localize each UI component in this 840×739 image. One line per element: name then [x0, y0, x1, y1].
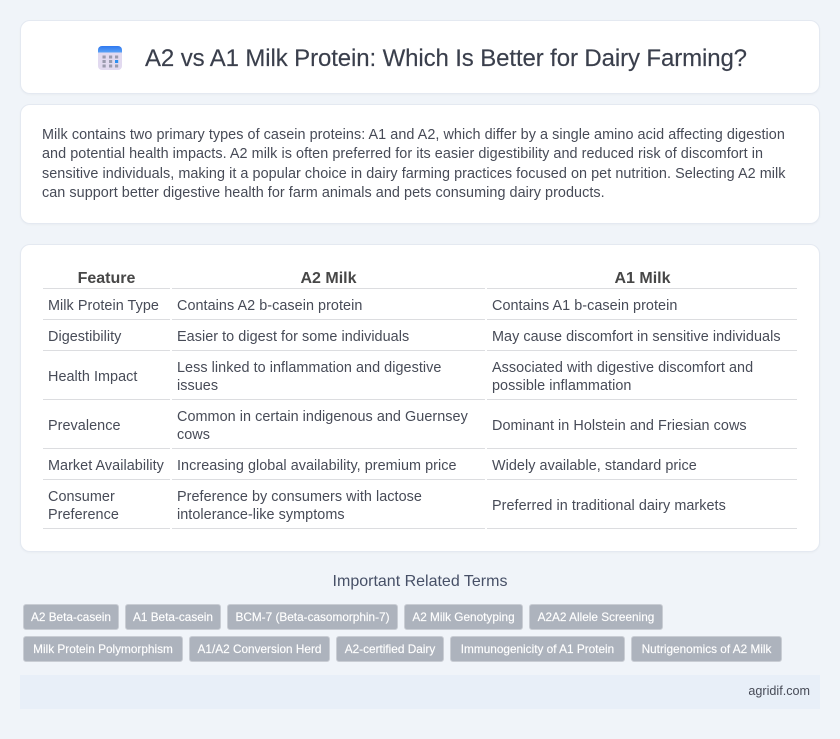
- row: consumer preference: Preferred in traditional dairy markets: [492, 498, 726, 514]
- related terms tags: A2 Milk Genotyping: [412, 610, 515, 624]
- header card: [20, 20, 820, 94]
- row: consumer preference: intolerance-like symptoms: [177, 507, 345, 523]
- related terms tags: A2 Beta-casein: [31, 610, 111, 624]
- row: consumer preference: Consumer: [48, 489, 115, 505]
- row: consumer preference: Preference by consumers with lactose: [177, 489, 422, 505]
- row: milk protein type: Contains A1 b-casein protein: [492, 298, 677, 314]
- related terms tags: [23, 604, 782, 662]
- icon: calendar: [98, 46, 122, 70]
- intro text: and potential health impacts. A2 milk is often preferred for its easier digestibility and reduced risk of discomfort in: [42, 146, 763, 162]
- row: digestibility: Digestibility: [48, 329, 121, 345]
- row: market availability: Widely available, standard price: [492, 458, 697, 474]
- row: market availability: Market Availability: [48, 458, 164, 474]
- footer source: agridif.com: [748, 684, 810, 698]
- row: consumer preference: Preference: [48, 507, 119, 523]
- row: prevalence: Dominant in Holstein and Friesian cows: [492, 418, 747, 434]
- panel: introduction: [20, 104, 820, 224]
- row: milk protein type: Contains A2 b-casein protein: [177, 298, 362, 314]
- row: consumer preference: [48, 489, 726, 523]
- row: prevalence: Prevalence: [48, 418, 120, 434]
- row: health impact: Less linked to inflammation and digestive: [177, 360, 441, 376]
- row: prevalence: Common in certain indigenous and Guernsey: [177, 409, 468, 425]
- table header: A2 Milk: [300, 270, 356, 287]
- related terms tags: BCM-7 (Beta-casomorphin-7): [235, 610, 390, 624]
- intro text: Milk contains two primary types of casein proteins: A1 and A2, which differ by a single amino acid affecting digestion: [42, 127, 785, 143]
- related terms tags: A2-certified Dairy: [345, 642, 435, 656]
- related terms tags: Immunogenicity of A1 Protein: [461, 642, 614, 656]
- row: prevalence: [48, 409, 747, 443]
- row: health impact: Associated with digestive discomfort and: [492, 360, 753, 376]
- table header: Feature: [78, 270, 135, 287]
- title: A2 vs A1 Milk Protein: Which Is Better for Dairy Farming?: [145, 45, 747, 72]
- related terms heading: Important Related Terms: [333, 573, 507, 590]
- related terms tags: Nutrigenomics of A2 Milk: [642, 642, 771, 656]
- related terms tags: Milk Protein Polymorphism: [33, 642, 173, 656]
- intro text: sensitive individuals, making it a popular choice in dairy farming practices focused on pet nutrition. Selecting A2 milk: [42, 166, 786, 182]
- footer: [20, 675, 820, 709]
- row: health impact: possible inflammation: [492, 378, 631, 394]
- row: health impact: issues: [177, 378, 218, 394]
- related terms tags: A1 Beta-casein: [133, 610, 213, 624]
- intro text: [42, 127, 786, 201]
- related terms tags: A1/A2 Conversion Herd: [198, 642, 321, 656]
- related terms tags: A2A2 Allele Screening: [538, 610, 654, 624]
- row: digestibility: [48, 329, 781, 345]
- row: prevalence: cows: [177, 427, 210, 443]
- row: digestibility: Easier to digest for some individuals: [177, 329, 409, 345]
- row: digestibility: May cause discomfort in sensitive individuals: [492, 329, 781, 345]
- intro text: can support better digestive health for farm animals and pets consuming dairy products.: [42, 185, 605, 201]
- row: market availability: Increasing global availability, premium price: [177, 458, 457, 474]
- table header: [78, 270, 670, 287]
- row: health impact: Health Impact: [48, 369, 137, 385]
- row: milk protein type: [48, 298, 677, 314]
- panel: comparison table: [20, 244, 820, 552]
- row: market availability: [48, 458, 697, 474]
- row: milk protein type: Milk Protein Type: [48, 298, 159, 314]
- table header: A1 Milk: [614, 270, 670, 287]
- row: health impact: [48, 360, 753, 394]
